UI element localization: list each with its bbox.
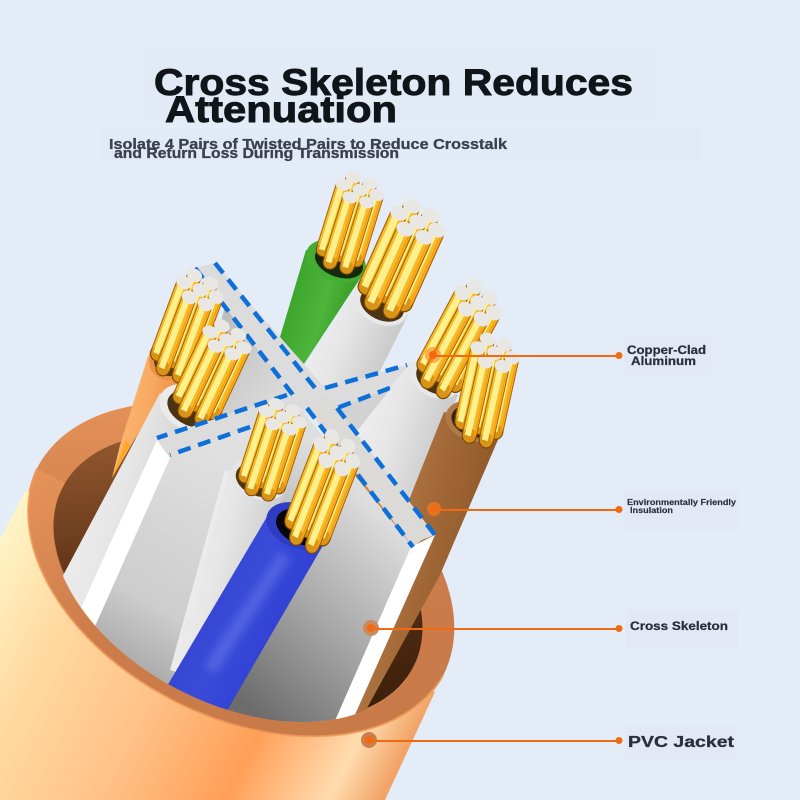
callout: insulation	[427, 490, 739, 530]
cable illustration	[0, 169, 526, 800]
green wire	[280, 169, 386, 367]
skeleton rear arm and face	[195, 263, 332, 420]
subtitle	[109, 137, 508, 162]
callout: cross skeleton: Cross Skeleton	[630, 619, 728, 633]
title: Cross Skeleton Reduces	[154, 62, 633, 103]
callout: copper-clad aluminum	[425, 336, 711, 376]
callout: copper-clad aluminum: Copper-Clad	[627, 343, 706, 357]
title: Attenuation	[165, 89, 397, 130]
callout: insulation: Environmentally Friendly	[627, 498, 737, 507]
white wire left	[50, 312, 257, 660]
callout: pvc jacket	[361, 725, 737, 759]
jacket front	[0, 468, 443, 800]
jacket interior	[6, 376, 470, 778]
subtitle: Isolate 4 Pairs of Twisted Pairs to Reduce Crosstalk	[109, 137, 508, 153]
orange wire	[112, 263, 228, 478]
callout: copper-clad aluminum: Aluminum	[631, 354, 696, 368]
white wire right	[350, 268, 510, 510]
blue wire	[150, 423, 366, 740]
skeleton front right face and arm	[180, 395, 435, 760]
white wire back	[303, 191, 451, 392]
white wire front	[175, 396, 309, 680]
subtitle: and Return Loss During Transmission	[114, 146, 399, 162]
skeleton front left face and arm	[62, 395, 330, 720]
callout: pvc jacket: PVC Jacket	[628, 734, 735, 751]
title	[100, 46, 702, 162]
callout: cross skeleton	[363, 610, 738, 648]
skeleton right arm	[318, 364, 410, 445]
jacket back rim	[0, 335, 511, 800]
callout: insulation: Insulation	[630, 506, 673, 515]
brown wire	[340, 329, 526, 730]
